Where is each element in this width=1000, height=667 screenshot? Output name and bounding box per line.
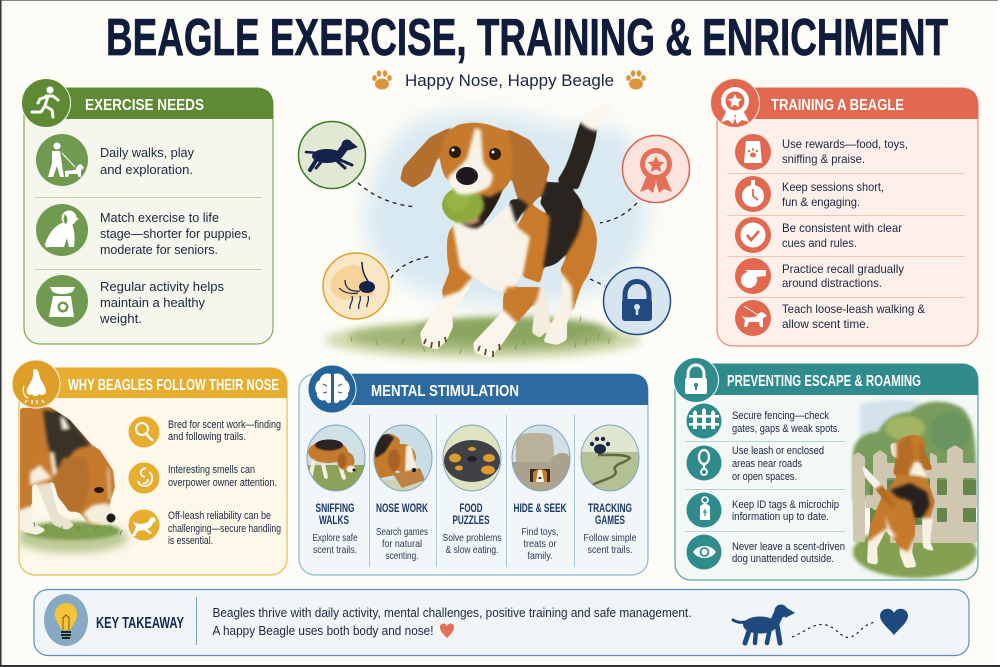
exercise heading: EXERCISE NEEDS: [85, 97, 204, 114]
panel: why beagles follow their nose: [12, 360, 287, 575]
badge: padlock: [604, 268, 670, 334]
row: id tags: [686, 492, 839, 528]
takeaway text: Beagles thrive with daily activity, mental challenges, positive training and safe management.: [212, 605, 692, 620]
central beagle illustration: [325, 102, 647, 359]
dashed connector: training: [600, 203, 637, 223]
takeaway text: [212, 605, 692, 638]
dashed connector: escape: [590, 279, 605, 286]
badge: running dog: [298, 122, 366, 188]
takeaway text: A happy Beagle uses both body and nose!: [212, 623, 434, 638]
activity: nose work: NOSE WORK: [376, 501, 428, 515]
row: short sessions: fun & engaging.: [782, 195, 860, 209]
fence beagle illustration: [852, 400, 977, 578]
activity: tracking games: scent trails.: [588, 545, 632, 556]
row: recall whistle: around distractions.: [782, 276, 882, 290]
row: bred for scent: [128, 416, 281, 448]
panel: mental stimulation: [299, 365, 648, 575]
row: daily walks: Daily walks, play: [100, 145, 194, 160]
row: healthy weight: Regular activity helps: [100, 279, 224, 294]
icon: large heart: [880, 609, 908, 635]
activity: nose work: [372, 425, 432, 562]
activity: food puzzles: & slow eating.: [446, 545, 498, 556]
row: secure fencing: gates, gaps & weak spots.: [732, 423, 840, 435]
escape heading: PREVENTING ESCAPE & ROAMING: [727, 373, 921, 390]
activity: sniffing walks: [307, 425, 365, 556]
activity: tracking games: TRACKING: [588, 501, 632, 515]
escape header: [696, 364, 978, 395]
panel: training a beagle: [710, 78, 978, 346]
row: bred for scent: and following trails.: [168, 431, 246, 443]
activity: sniffing walks: SNIFFING: [316, 501, 354, 515]
activity: nose work: scenting.: [386, 551, 418, 562]
activity: sniffing walks: scent trails.: [313, 545, 357, 556]
panel: key takeaway: [34, 590, 969, 656]
row: interesting smells: Interesting smells can: [168, 464, 255, 476]
row: leash: areas near roads: [732, 458, 802, 470]
training header: [735, 88, 978, 119]
row: secure fencing: Secure fencing—check: [732, 410, 829, 422]
row: never unattended: [686, 534, 845, 570]
row: short sessions: [735, 176, 884, 212]
row: consistency: [735, 217, 902, 253]
sniffing beagle illustration: [16, 407, 128, 553]
activity: food puzzles: FOOD: [460, 501, 483, 515]
row: off-leash: challenging—secure handling: [168, 523, 281, 535]
activity: food puzzles: Solve problems: [442, 533, 502, 544]
row: off-leash: is essential.: [168, 535, 213, 547]
icon: padlock: [674, 358, 718, 402]
activity: hide and seek: HIDE & SEEK: [514, 501, 567, 515]
activity: nose work: Search games: [376, 527, 428, 538]
icon: brain: [308, 365, 356, 413]
row: consistency: Be consistent with clear: [782, 221, 902, 235]
row: life stage: moderate for seniors.: [100, 242, 218, 257]
icon: small heart: [440, 623, 454, 638]
dashed connector: nose: [391, 256, 432, 278]
why heading: WHY BEAGLES FOLLOW THEIR NOSE: [68, 377, 279, 394]
row: daily walks: and exploration.: [100, 162, 193, 177]
row: id tags: information up to date.: [732, 511, 829, 523]
row: leash: Use leash or enclosed: [732, 445, 824, 457]
activity: sniffing walks: WALKS: [319, 513, 349, 527]
row: never unattended: Never leave a scent-driven: [732, 541, 845, 553]
icon: light bulb: [44, 594, 88, 646]
row: healthy weight: maintain a healthy: [100, 295, 205, 310]
badge: ribbon: [622, 136, 690, 202]
dashed connector: exercise: [358, 183, 416, 207]
mental header: [330, 374, 648, 405]
training heading: TRAINING A BEAGLE: [771, 97, 904, 114]
icon: dog silhouette: [733, 604, 795, 643]
why header: [38, 368, 287, 398]
row: healthy weight: [36, 275, 224, 327]
mental heading: MENTAL STIMULATION: [371, 383, 519, 400]
icon: right paw: [626, 70, 646, 90]
row: rewards: sniffing & praise.: [782, 152, 865, 166]
row: life stage: stage—shorter for puppies,: [100, 226, 251, 241]
row: secure fencing: [686, 404, 840, 438]
row: interesting smells: overpower owner attention.: [168, 477, 277, 489]
icon: nose: [12, 360, 60, 408]
row: loose leash: allow scent time.: [782, 317, 869, 331]
row: id tags: Keep ID tags & microchip: [732, 499, 839, 511]
icon: left paw: [372, 70, 392, 90]
row: loose leash: [735, 300, 925, 336]
activity: hide and seek: [512, 425, 570, 562]
row: life stage: Match exercise to life: [100, 210, 219, 225]
row: rewards: Use rewards—food, toys,: [782, 137, 908, 151]
row: recall whistle: [735, 258, 904, 294]
activity: sniffing walks: Explore safe: [312, 533, 358, 544]
key takeaway label: KEY TAKEAWAY: [96, 615, 184, 632]
row: loose leash: Teach loose-leash walking &: [782, 302, 925, 316]
row: interesting smells: [128, 462, 277, 494]
row: leash: [686, 445, 824, 483]
row: life stage: [36, 204, 251, 257]
activity: tracking games: GAMES: [595, 513, 625, 527]
dashed trail: [792, 622, 876, 637]
row: consistency: cues and rules.: [782, 236, 857, 250]
activity: food puzzles: [442, 425, 502, 556]
panel: preventing escape and roaming: [674, 358, 978, 580]
row: off-leash: [128, 510, 281, 547]
badge: nose: [323, 253, 389, 319]
row: bred for scent: Bred for scent work—finding: [168, 419, 281, 431]
activity: food puzzles: PUZZLES: [452, 513, 490, 527]
row: off-leash: Off-leash reliability can be: [168, 510, 271, 522]
row: leash: or open spaces.: [732, 471, 797, 483]
row: never unattended: dog unattended outside.: [732, 553, 834, 565]
activity: nose work: for natural: [382, 539, 422, 550]
row: short sessions: Keep sessions short,: [782, 180, 884, 194]
activity: hide and seek: treats or: [524, 539, 557, 550]
row: daily walks: [36, 134, 194, 186]
activity: tracking games: [581, 425, 639, 556]
panel: exercise needs: [22, 78, 273, 344]
subtitle: Happy Nose, Happy Beagle: [405, 71, 614, 90]
icon: rosette: [710, 78, 760, 128]
exercise header: [40, 88, 273, 119]
row: rewards: [735, 134, 908, 170]
icon: runner: [22, 78, 70, 128]
activity: hide and seek: family.: [528, 551, 552, 562]
row: healthy weight: weight.: [99, 311, 142, 326]
row: recall whistle: Practice recall gradually: [782, 262, 904, 276]
activity: hide and seek: Find toys,: [522, 527, 558, 538]
activity: tracking games: Follow simple: [584, 533, 637, 544]
